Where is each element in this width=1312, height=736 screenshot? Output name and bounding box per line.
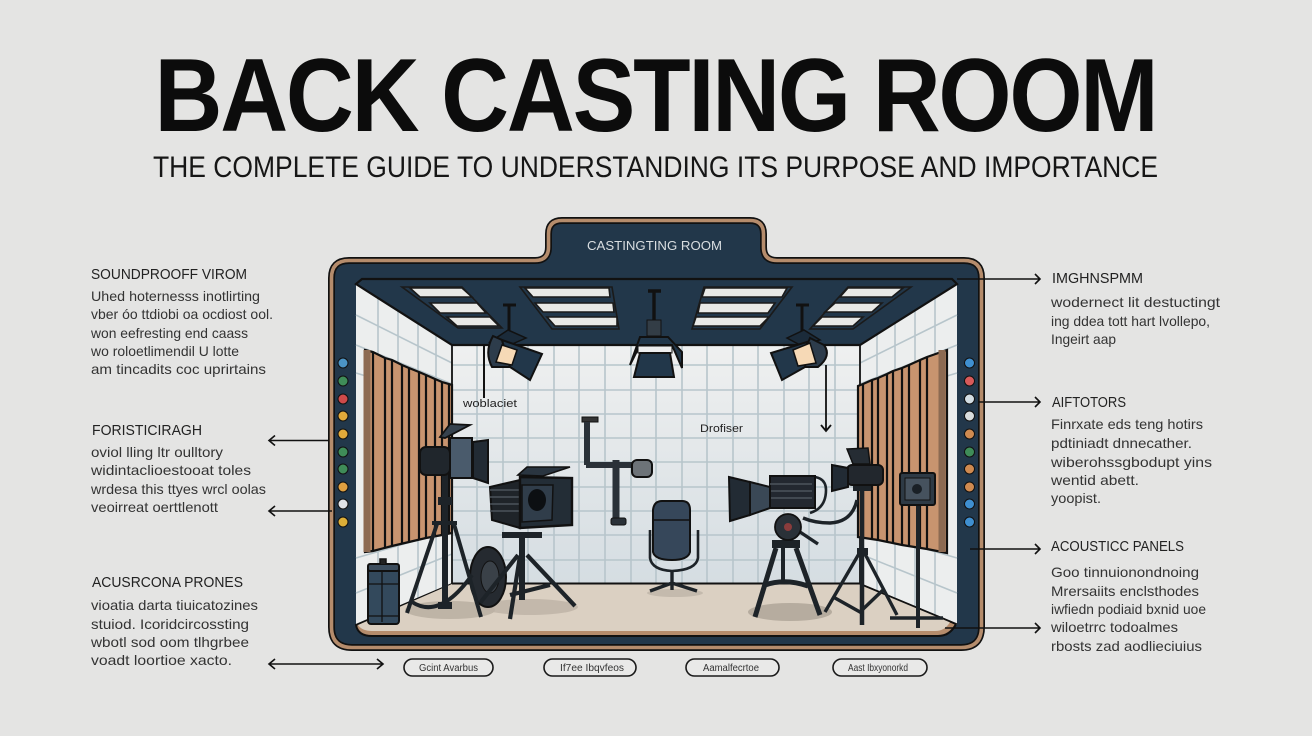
title: BACK CASTING ROOM [154, 38, 1156, 154]
callout: acusrcona: vioatia darta tiuicatozines [91, 597, 258, 613]
legend pill 4: Aast Ibxyonorkd [848, 663, 908, 674]
callout: aiftotors: AIFTOTORS [1052, 395, 1126, 411]
studio lamp right [771, 305, 827, 380]
callout: soundproof: am tincadits coc uprirtains [91, 361, 266, 377]
callout: acoustic panels: Mrersaiits enclsthodes [1051, 583, 1199, 599]
legend pill 3 [686, 659, 779, 676]
callout: soundproof: wo roloetlimendil U lotte [90, 343, 239, 359]
chair [650, 501, 698, 591]
callout: acusrcona: stuiod. Icoridcircossting [91, 616, 249, 632]
callout: aiftotors: wentid abett. [1050, 472, 1139, 488]
floor [356, 584, 956, 636]
panel: room frame [332, 220, 982, 648]
callout: acoustic panels: rbosts zad aodlieciuius [1051, 638, 1202, 654]
right wall [452, 284, 957, 625]
callout: foristicragh [90, 423, 266, 515]
legend pill 1: Gcint Avarbus [419, 663, 478, 674]
callout: acoustic panels: iwfiedn podiaid bxnid uoe [1051, 601, 1206, 617]
studio lamp left [484, 305, 542, 398]
callout: aiftotors: wiberohssgbodupt yins [1050, 454, 1212, 470]
callout: acoustic panels: Goo tinnuionondnoing [1051, 564, 1199, 580]
callout: acoustic panels: wiloetrrc todoalmes [1050, 619, 1178, 635]
callout: soundproof: SOUNDPROOFF VIROM [91, 267, 247, 283]
panel: room interior [356, 279, 957, 636]
monitor on stand [890, 473, 943, 628]
callout: soundproof: won eefresting end caass [90, 325, 248, 341]
legend pill 2 [544, 659, 636, 676]
callout: foristicragh: oviol lling ltr oulltory [91, 444, 223, 460]
arrows left [269, 436, 383, 669]
callout: imghnspmm: Ingeirt aap [1051, 331, 1116, 347]
callout: foristicragh: wrdesa this ttyes wrcl oolas [90, 481, 266, 497]
stand with camera right [825, 448, 897, 625]
legend pill 2: If7ee Ibqvfeos [560, 663, 624, 674]
callout: aiftotors [1050, 395, 1212, 506]
callout: foristicragh: FORISTICIRAGH [92, 423, 202, 439]
callout: imghnspmm: ing ddea tott hart lvollepo, [1051, 313, 1210, 329]
back wall [452, 344, 860, 584]
callout: acusrcona [90, 575, 258, 668]
callout: imghnspmm: IMGHNSPMM [1052, 271, 1143, 287]
callout: acusrcona: wbotl sod oom tlhgrbee [90, 634, 249, 650]
wall label right: Drofiser [700, 423, 743, 435]
acoustic panel left [365, 350, 452, 552]
acoustic panel right [858, 350, 947, 553]
film reel [470, 547, 506, 607]
subtitle: THE COMPLETE GUIDE TO UNDERSTANDING ITS PURPOSE AND IMPORTANCE [153, 151, 1158, 184]
camera on tripod centre-right [729, 476, 857, 617]
callout: soundproof: Uhed hoternesss inotlirting [91, 288, 260, 304]
callout: acoustic panels: ACOUSTICC PANELS [1051, 539, 1184, 555]
studio lamp centre [630, 291, 682, 377]
callout: acusrcona: voadt loortioe xacto. [91, 652, 232, 668]
callout: soundproof [90, 267, 273, 377]
frame title: CASTINGTING ROOM [587, 239, 722, 253]
ceiling [356, 279, 957, 345]
callout: aiftotors: Finrxate eds teng hotirs [1051, 416, 1203, 432]
callout: foristicragh: widintaclioestooat toles [90, 462, 251, 478]
camera on tall stand left [407, 424, 488, 617]
pipe mic mount [582, 417, 652, 525]
callout: imghnspmm: wodernect lit destuctingt [1050, 294, 1220, 310]
ceiling lights [402, 287, 911, 329]
arrows right [945, 274, 1040, 633]
status dots right [964, 358, 974, 527]
camera on tripod centre-left [480, 467, 575, 619]
left wall [356, 284, 452, 625]
legend pill 3: Aamalfecrtoe [703, 663, 759, 674]
callout: soundproof: vber óo ttdiobi oa ocdiost ool. [91, 306, 273, 322]
legend pill 1 [404, 659, 493, 676]
wall arrow: right lamp [821, 365, 831, 431]
legend pill 4 [833, 659, 927, 676]
callout: acoustic panels [1050, 539, 1206, 654]
film can [368, 559, 399, 624]
callout: imghnspmm [1050, 271, 1220, 347]
status dots left [338, 358, 348, 527]
wall label left: woblaciet [462, 398, 517, 410]
callout: foristicragh: veoirreat oerttlenott [91, 499, 218, 515]
callout: acusrcona: ACUSRCONA PRONES [92, 575, 243, 591]
callout: aiftotors: pdtiniadt dnnecather. [1051, 435, 1192, 451]
callout: aiftotors: yoopist. [1051, 490, 1101, 506]
